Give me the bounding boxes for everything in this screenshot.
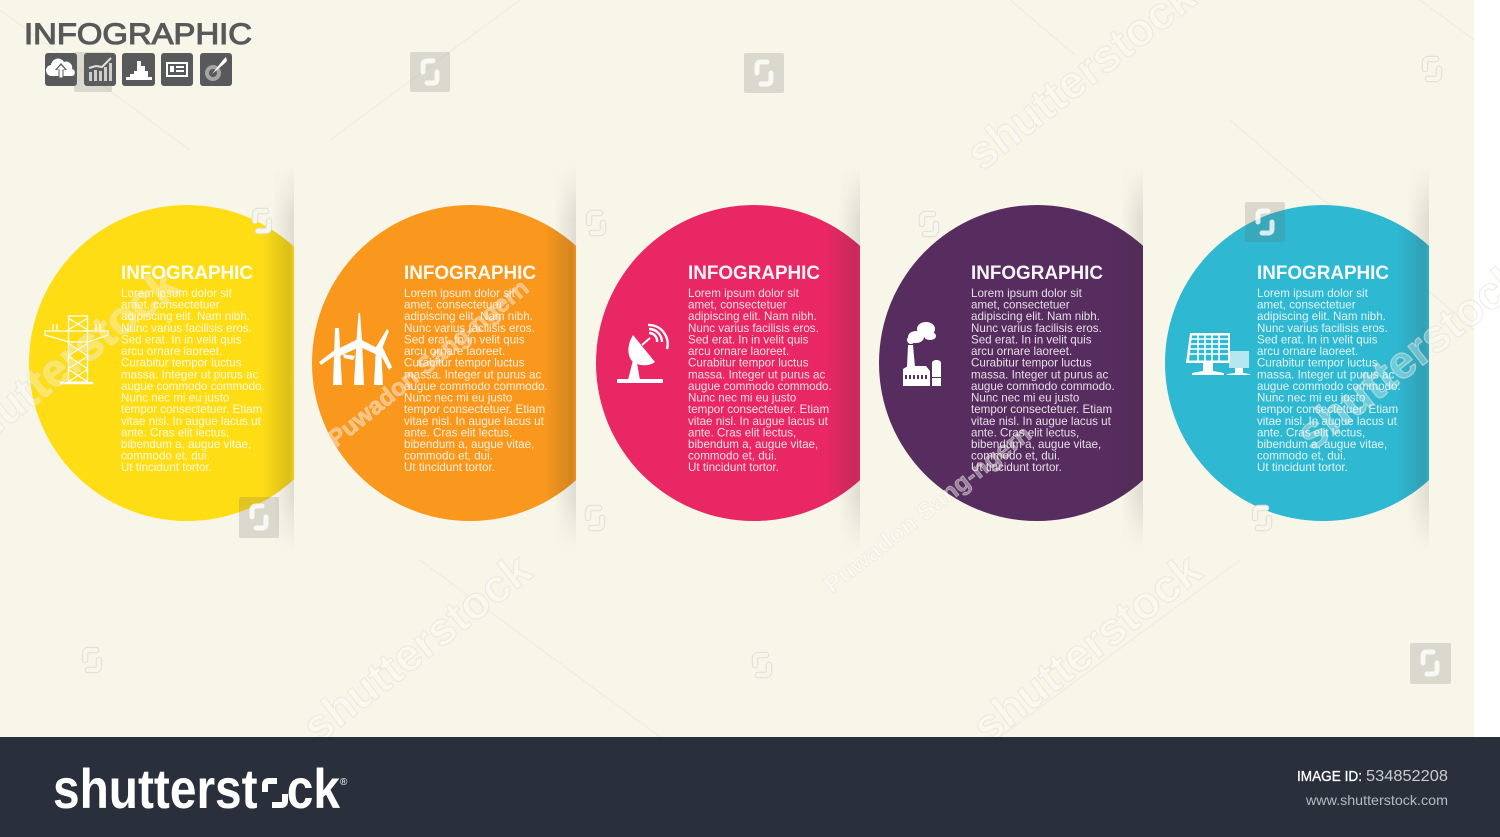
image id: IMAGE ID:: [1297, 768, 1362, 785]
heading: INFOGRAPHIC: [121, 263, 253, 284]
body text: Nunc varius facilisis eros.: [688, 322, 819, 335]
body text: bibendum a, augue vitae,: [688, 438, 818, 451]
heading: INFOGRAPHIC: [688, 263, 820, 284]
body text: tempor consectetuer. Etiam: [121, 403, 262, 416]
body text: Ut tincidunt tortor.: [404, 461, 495, 474]
icon: power pylon: [45, 316, 108, 383]
footer bar: [0, 737, 1500, 837]
body text: Nunc varius facilisis eros.: [121, 322, 252, 335]
body text: tempor consectetuer. Etiam: [688, 403, 829, 416]
body text: ante. Cras elit lectus,: [971, 426, 1079, 439]
panel: purple: [879, 205, 1143, 521]
website: www.shutterstock.com: [1305, 792, 1448, 808]
body text: bibendum a, augue vitae,: [121, 438, 251, 451]
body text: arcu ornare laoreet.: [404, 345, 505, 358]
icon: solar panels: [1186, 333, 1250, 375]
body text: Ut tincidunt tortor.: [121, 461, 212, 474]
icon: wind turbines: [319, 313, 392, 385]
body text: commodo et, dui.: [688, 450, 777, 463]
shutterstock logo: ®: [340, 777, 348, 788]
body text: adipiscing elit. Nam nibh.: [404, 310, 533, 323]
icon: satellite dish: [617, 325, 668, 383]
body text: augue commodo commodo.: [971, 380, 1115, 393]
body text: bibendum a, augue vitae,: [404, 438, 534, 451]
icon row: [45, 53, 232, 86]
body text: amet, consectetuer: [971, 299, 1070, 312]
icon: bar histogram: [122, 53, 155, 86]
watermarks: shutterstock: [292, 542, 541, 753]
heading: INFOGRAPHIC: [1257, 263, 1389, 284]
body text: bibendum a, augue vitae,: [1257, 438, 1387, 451]
body text: Nunc nec mi eu justo: [404, 392, 512, 405]
watermarks: Puwadon Sang-ngern: [323, 274, 534, 453]
body text: Nunc varius facilisis eros.: [1257, 322, 1388, 335]
body text: Curabitur tempor luctus: [121, 357, 242, 370]
body text: Sed erat. In in velit quis: [1257, 333, 1378, 346]
body text: Ut tincidunt tortor.: [971, 461, 1062, 474]
fold shadows: [280, 183, 1429, 532]
body text: augue commodo commodo.: [121, 380, 265, 393]
body text: Sed erat. In in velit quis: [121, 333, 242, 346]
body text: Lorem ipsum dolor sit: [971, 287, 1083, 300]
body text: augue commodo commodo.: [404, 380, 548, 393]
body text: vitae nisl. In augue lacus ut: [1257, 415, 1398, 428]
body text: Nunc nec mi eu justo: [121, 392, 229, 405]
body text: Sed erat. In in velit quis: [688, 333, 809, 346]
watermark logo tiles: [74, 52, 1451, 684]
body text: ante. Cras elit lectus,: [1257, 426, 1365, 439]
body text: massa. Integer ut purus ac: [971, 368, 1108, 381]
body text: commodo et, dui.: [121, 450, 210, 463]
body text: augue commodo commodo.: [688, 380, 832, 393]
icon: screen card: [161, 53, 193, 86]
circle: [29, 205, 294, 521]
image id: [1297, 768, 1448, 785]
body text: Nunc varius facilisis eros.: [404, 322, 535, 335]
body text: tempor consectetuer. Etiam: [1257, 403, 1398, 416]
body text: massa. Integer ut purus ac: [1257, 368, 1394, 381]
heading: INFOGRAPHIC: [404, 263, 536, 284]
body text: Nunc varius facilisis eros.: [971, 322, 1102, 335]
body text: Lorem ipsum dolor sit: [688, 287, 800, 300]
image id: 534852208: [1366, 768, 1448, 785]
body text: bibendum a, augue vitae,: [971, 438, 1101, 451]
circle: [596, 205, 860, 521]
body text: arcu ornare laoreet.: [971, 345, 1072, 358]
body text: vitae nisl. In augue lacus ut: [971, 415, 1112, 428]
body text: adipiscing elit. Nam nibh.: [971, 310, 1100, 323]
panel: magenta: [596, 205, 860, 521]
body text: vitae nisl. In augue lacus ut: [688, 415, 829, 428]
body text: massa. Integer ut purus ac: [121, 368, 258, 381]
body text: adipiscing elit. Nam nibh.: [688, 310, 817, 323]
circle: [312, 205, 576, 521]
body text: arcu ornare laoreet.: [1257, 345, 1358, 358]
body text: Lorem ipsum dolor sit: [404, 287, 516, 300]
title: INFOGRAPHIC: [24, 18, 252, 51]
body text: tempor consectetuer. Etiam: [404, 403, 545, 416]
circle: [1165, 205, 1429, 521]
body text: ante. Cras elit lectus,: [404, 426, 512, 439]
body text: Curabitur tempor luctus: [971, 357, 1092, 370]
icon: target arrow: [200, 53, 232, 86]
body text: adipiscing elit. Nam nibh.: [1257, 310, 1386, 323]
icon: cloud upload: [45, 53, 77, 86]
body text: Nunc nec mi eu justo: [688, 392, 796, 405]
body text: Nunc nec mi eu justo: [1257, 392, 1365, 405]
body text: Sed erat. In in velit quis: [971, 333, 1092, 346]
body text: ante. Cras elit lectus,: [121, 426, 229, 439]
heading: INFOGRAPHIC: [971, 263, 1103, 284]
body text: Ut tincidunt tortor.: [1257, 461, 1348, 474]
icon: growth chart: [84, 53, 116, 86]
body text: arcu ornare laoreet.: [688, 345, 789, 358]
body text: Nunc nec mi eu justo: [971, 392, 1079, 405]
body text: arcu ornare laoreet.: [121, 345, 222, 358]
body text: amet, consectetuer: [121, 299, 220, 312]
body text: vitae nisl. In augue lacus ut: [121, 415, 262, 428]
body text: Curabitur tempor luctus: [1257, 357, 1378, 370]
watermarks: Puwadon Sang-ngern: [819, 420, 1037, 599]
body text: amet, consectetuer: [688, 299, 787, 312]
panel: yellow: [29, 205, 294, 521]
body text: tempor consectetuer. Etiam: [971, 403, 1112, 416]
body text: commodo et, dui.: [404, 450, 493, 463]
icon: factory: [903, 322, 941, 386]
panel: orange: [312, 205, 576, 521]
body text: Curabitur tempor luctus: [404, 357, 525, 370]
body text: commodo et, dui.: [971, 450, 1060, 463]
body text: amet, consectetuer: [404, 299, 503, 312]
body text: commodo et, dui.: [1257, 450, 1346, 463]
body text: Ut tincidunt tortor.: [688, 461, 779, 474]
watermarks: shutterstock: [962, 542, 1211, 753]
body text: massa. Integer ut purus ac: [404, 368, 541, 381]
body text: Lorem ipsum dolor sit: [1257, 287, 1369, 300]
body text: Sed erat. In in velit quis: [404, 333, 525, 346]
body text: amet, consectetuer: [1257, 299, 1356, 312]
body text: ante. Cras elit lectus,: [688, 426, 796, 439]
panel: cyan: [1165, 205, 1429, 521]
body text: Lorem ipsum dolor sit: [121, 287, 233, 300]
shutterstock logo: shutterstock: [53, 757, 341, 820]
body text: Curabitur tempor luctus: [688, 357, 809, 370]
body text: adipiscing elit. Nam nibh.: [121, 310, 250, 323]
circle: [879, 205, 1143, 521]
body text: massa. Integer ut purus ac: [688, 368, 825, 381]
body text: augue commodo commodo.: [1257, 380, 1401, 393]
body text: vitae nisl. In augue lacus ut: [404, 415, 545, 428]
